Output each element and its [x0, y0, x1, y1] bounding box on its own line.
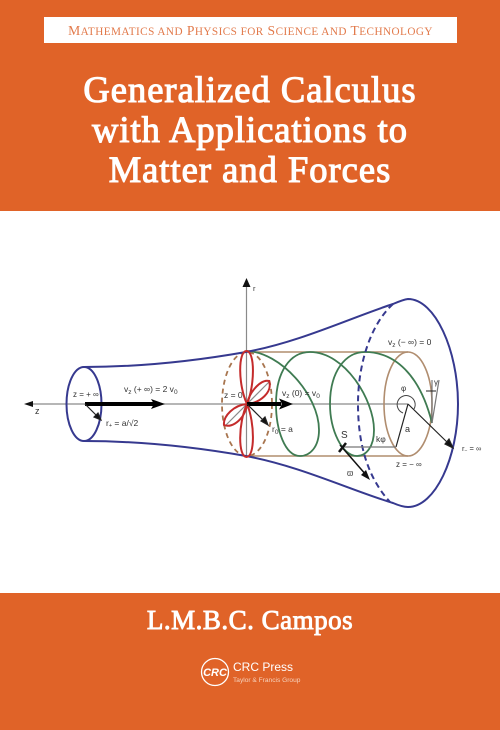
labels: (0) = v [290, 388, 317, 398]
labels: (− ∞) = 0 [396, 337, 432, 347]
labels: 0 [174, 389, 178, 396]
dashed brown circle at z=0 [222, 352, 272, 456]
labels: (+ ∞) = 2 v [132, 384, 175, 394]
series banner [44, 17, 457, 43]
icon: axis arrowheads [24, 278, 250, 407]
publisher name: CRC Press [233, 660, 293, 674]
red flower lobes [224, 351, 270, 457]
angle marks [397, 396, 415, 413]
labels: v [124, 384, 128, 394]
title: Generalized Calculus [83, 69, 417, 110]
diagram [24, 278, 482, 508]
green helix [247, 351, 432, 456]
thick velocity arrows [85, 398, 293, 410]
bottom orange band [0, 593, 500, 730]
blue funnel [66, 299, 458, 507]
labels: = a [278, 424, 293, 434]
S vector [339, 443, 370, 480]
thin radius arrows [85, 380, 453, 448]
icon: CRC circle: CRC [203, 667, 228, 679]
labels: z = 0 [224, 390, 243, 400]
labels: r [106, 418, 109, 428]
labels: r [272, 424, 275, 434]
author: L.M.B.C. Campos [147, 605, 353, 635]
labels: a [405, 424, 410, 434]
labels: z [128, 389, 132, 396]
brown cylinder [246, 352, 432, 456]
labels [35, 284, 481, 478]
labels: kφ [376, 434, 386, 444]
publisher name: Taylor & Francis Group [233, 677, 301, 684]
axes [30, 285, 408, 457]
labels: = a/√2 [112, 418, 139, 428]
labels: γ [434, 378, 438, 387]
labels: ϖ [347, 469, 353, 478]
labels: = ∞ [467, 444, 481, 453]
labels: z [286, 393, 290, 400]
labels: z [392, 342, 396, 349]
labels: r [462, 444, 464, 453]
labels: + [109, 423, 112, 429]
labels: 0 [316, 393, 320, 400]
labels: r [253, 284, 256, 293]
series banner: MATHEMATICS AND PHYSICS FOR SCIENCE AND TECHNOLOGY [68, 23, 433, 38]
title: with Applications to [92, 109, 408, 150]
labels: 0 [275, 429, 279, 436]
labels: S [341, 430, 348, 441]
CRC Press logo [200, 658, 301, 686]
title: Matter and Forces [109, 149, 391, 190]
title [83, 69, 417, 190]
labels: v [388, 337, 392, 347]
labels: z = + ∞ [73, 390, 99, 399]
publisher name [233, 660, 301, 684]
top orange band [0, 0, 500, 211]
labels: φ [401, 384, 406, 393]
labels: v [282, 388, 286, 398]
labels: − [464, 448, 468, 454]
labels: z [35, 406, 40, 416]
icon: gamma arrow [426, 390, 436, 392]
labels: z = − ∞ [396, 460, 422, 469]
